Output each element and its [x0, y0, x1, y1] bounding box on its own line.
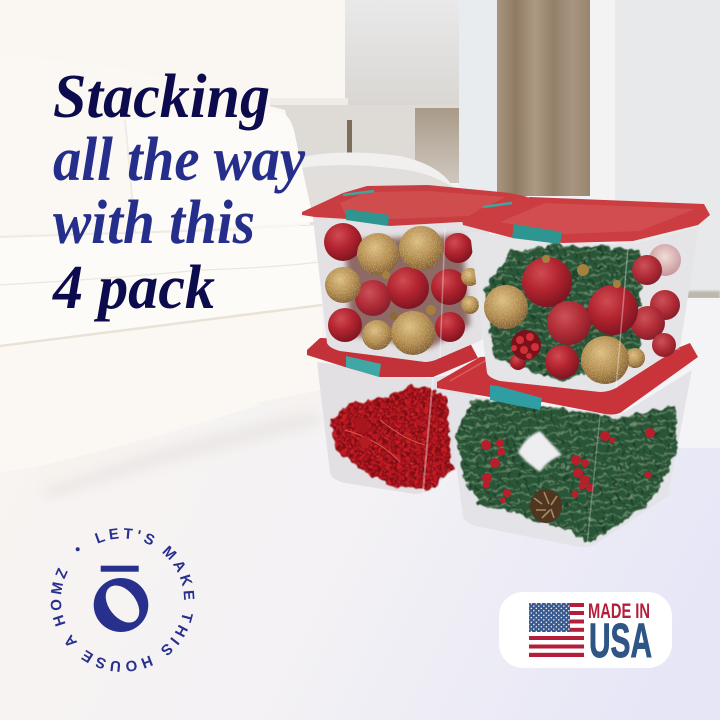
ornaments [484, 244, 681, 384]
ornaments [324, 223, 479, 355]
headline line 1: Stacking [53, 63, 270, 131]
usa text: USA [589, 615, 652, 668]
latch [490, 385, 542, 410]
headline line 2: all the way [53, 126, 305, 194]
ornament caps [577, 264, 589, 276]
logo ring [94, 578, 148, 632]
white sofa [0, 55, 470, 498]
wreath [455, 400, 678, 543]
headline line 4: 4 pack [52, 254, 215, 322]
latch [346, 356, 381, 377]
sofa arm [298, 152, 470, 260]
box: wreath, lower right [437, 343, 698, 547]
headline [52, 63, 305, 322]
circular slogan: LET'S MAKE THIS HOUSE A HOMZ [50, 528, 194, 672]
pinecone [530, 489, 562, 523]
logo bar [101, 566, 139, 572]
greenery [484, 244, 640, 380]
lid [302, 185, 528, 226]
made in usa badge [499, 592, 672, 668]
made in text: MADE IN [588, 600, 650, 623]
lid [437, 343, 698, 414]
latches [512, 224, 562, 244]
american flag [529, 603, 584, 657]
pillow [125, 112, 314, 232]
sofa back [0, 55, 310, 235]
sofa base [0, 306, 322, 472]
seat cushion [0, 225, 322, 348]
floor shadow [40, 412, 320, 498]
box: red berries, lower left [307, 338, 480, 494]
box: ornaments, upper left [302, 185, 528, 362]
berry cluster [511, 330, 541, 360]
lid [307, 338, 478, 377]
lid [462, 197, 710, 243]
headline line 3: with this [53, 189, 255, 257]
sofa feet [37, 438, 157, 484]
latches [346, 209, 389, 226]
box: ornaments and greenery, upper right [462, 197, 710, 392]
wreath red berries [481, 428, 655, 503]
wreath hole [518, 431, 562, 472]
berry garland [329, 385, 452, 490]
slogan dot [76, 547, 80, 551]
shadow between ornaments [345, 235, 470, 348]
brand logo seal [50, 528, 194, 672]
